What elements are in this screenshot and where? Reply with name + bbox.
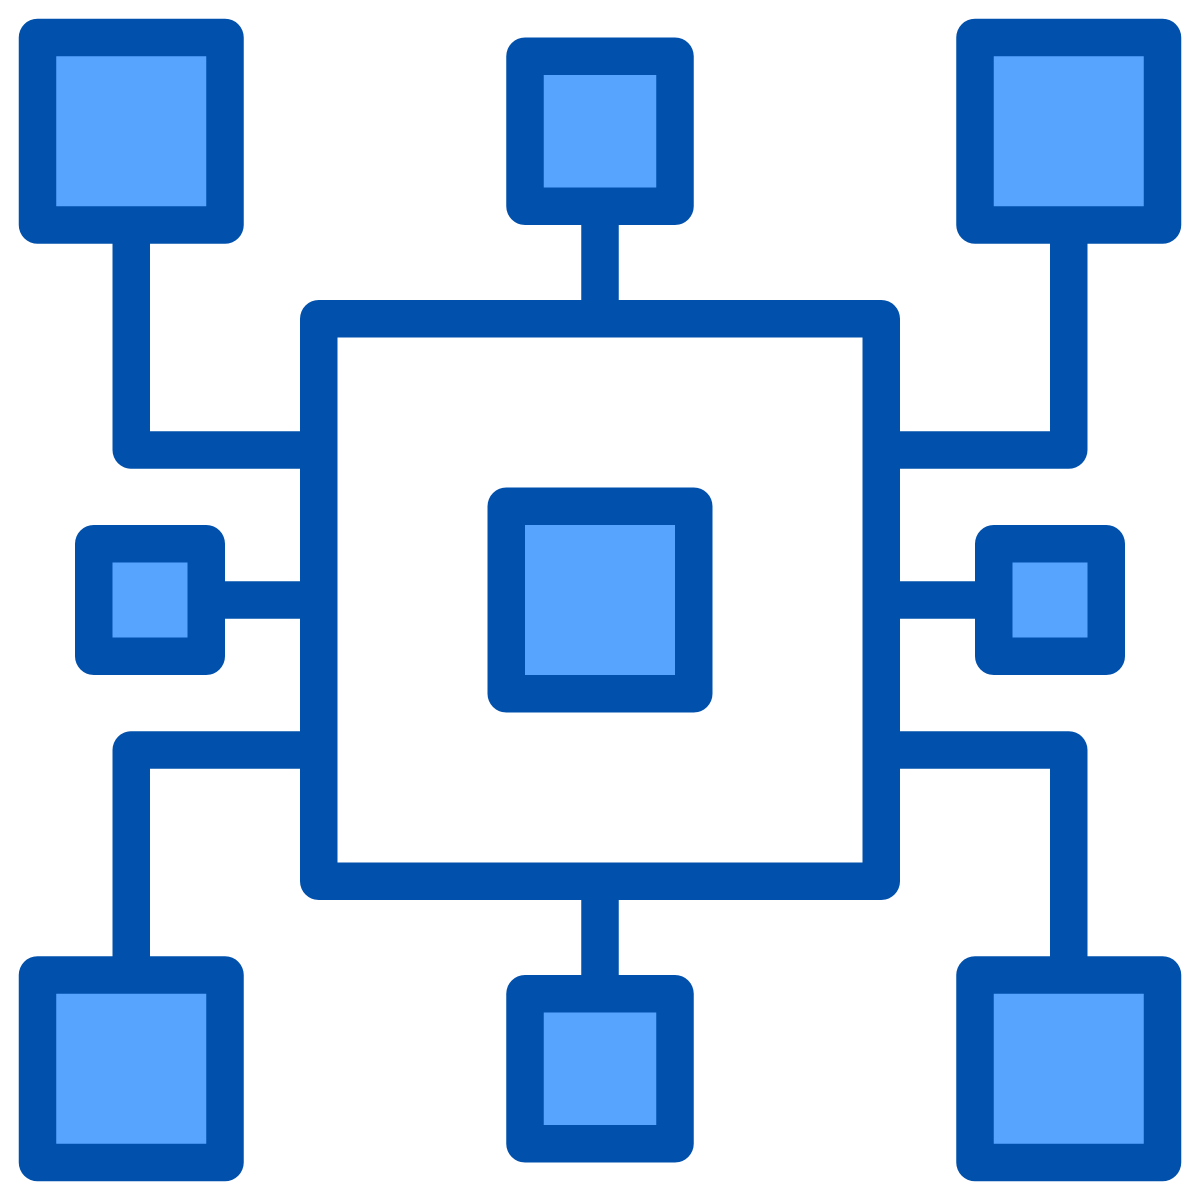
node: top left — [38, 38, 225, 225]
connector: bottom left — [131, 750, 318, 975]
connector: top right — [882, 225, 1069, 450]
connector: top — [581, 206, 619, 318]
center node — [506, 506, 694, 694]
node: left — [94, 544, 206, 656]
connector: left — [206, 581, 318, 619]
node: top right — [975, 38, 1162, 225]
central frame — [319, 319, 881, 881]
connector: bottom right — [882, 750, 1069, 975]
node: bottom right — [975, 975, 1162, 1162]
connector: right — [882, 581, 994, 619]
node: right — [994, 544, 1106, 656]
node: bottom left — [38, 975, 225, 1162]
connector: bottom — [581, 882, 619, 994]
connector: top left — [131, 225, 318, 450]
node: top — [525, 56, 675, 206]
node: bottom — [525, 994, 675, 1144]
